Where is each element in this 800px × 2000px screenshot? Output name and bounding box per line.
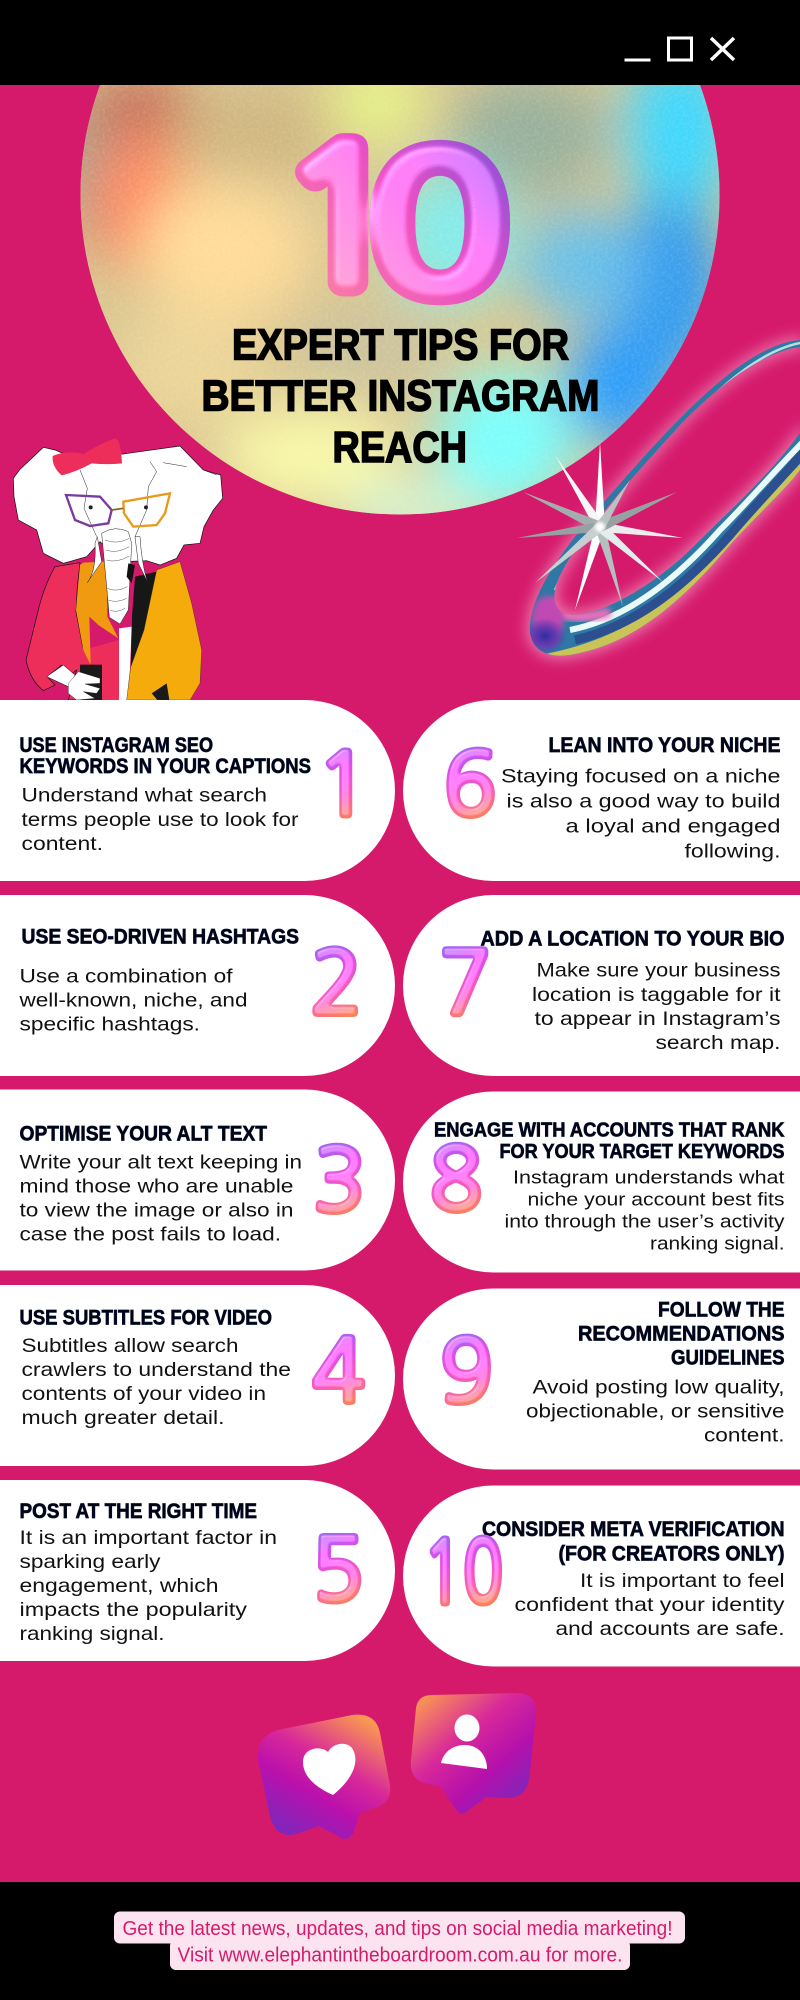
body 2 — [18, 966, 248, 1036]
icon: person speech bubble — [411, 1693, 536, 1814]
body 5: impacts the popularity — [20, 1599, 247, 1621]
body 7: location is taggable for it — [532, 984, 781, 1006]
card 8 — [403, 1092, 800, 1272]
body 5 — [20, 1527, 277, 1645]
body 8: Instagram understands what — [513, 1168, 784, 1188]
dark inner shade — [575, 450, 800, 640]
red bow — [53, 438, 122, 475]
body 7 — [532, 960, 781, 1054]
person head — [454, 1714, 480, 1742]
body 9 — [526, 1376, 784, 1446]
body 1 — [22, 784, 299, 855]
title: BETTER INSTAGRAM — [202, 372, 600, 420]
body 5: ranking signal. — [20, 1623, 164, 1645]
body 5: It is an important factor in — [20, 1527, 277, 1549]
magenta tip — [532, 596, 564, 640]
number 5: 5 — [312, 1527, 364, 1613]
body 3: case the post fails to load. — [20, 1224, 281, 1246]
heading 6: LEAN INTO YOUR NICHE — [548, 734, 780, 757]
highlight line 2 — [170, 1940, 630, 1970]
red jacket — [26, 563, 92, 700]
ring band — [530, 340, 800, 656]
heart — [303, 1744, 355, 1795]
body 8 — [504, 1168, 784, 1254]
yellow outer edge — [548, 468, 800, 660]
body 1: content. — [22, 833, 103, 855]
scarf knot — [127, 563, 135, 583]
heading 2: USE SEO-DRIVEN HASHTAGS — [22, 926, 299, 948]
black lapel — [131, 572, 157, 667]
number 3: 3 — [313, 1138, 366, 1224]
eyes — [89, 505, 93, 509]
body 3: Write your alt text keeping in — [20, 1152, 302, 1174]
heading 9: FOLLOW THE — [658, 1298, 784, 1322]
body 5: sparking early — [20, 1551, 161, 1573]
card 6 — [403, 700, 800, 881]
body 9: content. — [704, 1424, 784, 1446]
body 6: following. — [684, 840, 780, 862]
body 7: Make sure your business — [536, 960, 781, 982]
hand — [68, 672, 100, 700]
body 3 — [20, 1152, 302, 1246]
header bar with window controls — [0, 0, 800, 85]
highlight line 1 — [114, 1912, 685, 1944]
orange scarf — [76, 562, 118, 665]
body 10: confident that your identity — [514, 1594, 785, 1616]
yellow jacket — [127, 562, 202, 700]
body 7: to appear in Instagram’s — [534, 1008, 781, 1030]
heading 10 — [482, 1518, 784, 1566]
phone — [80, 665, 102, 700]
glasses — [66, 495, 112, 526]
body 9: objectionable, or sensitive — [526, 1400, 784, 1422]
body 4: Subtitles allow search — [22, 1335, 238, 1357]
icon: maximize — [668, 38, 692, 60]
number 4: 4 — [312, 1328, 365, 1414]
white shirt — [119, 627, 132, 700]
card 7 — [403, 895, 800, 1076]
card 9 — [403, 1288, 800, 1470]
arm — [47, 665, 75, 687]
elephant mascot — [13, 438, 223, 700]
body 10: It is important to feel — [580, 1570, 784, 1592]
body 6: is also a good way to build — [506, 790, 780, 812]
number 8: 8 — [430, 1136, 482, 1222]
body 10 — [514, 1570, 785, 1640]
heading 10: (FOR CREATORS ONLY) — [558, 1542, 784, 1566]
heading 4: USE SUBTITLES FOR VIDEO — [20, 1306, 272, 1330]
big balloon number 10: 1 — [279, 124, 404, 311]
heading 9: GUIDELINES — [671, 1346, 784, 1370]
red shirt — [80, 640, 119, 700]
body 4: much greater detail. — [22, 1407, 224, 1429]
number 1: 1 — [317, 742, 369, 828]
body 4: crawlers to understand the — [22, 1359, 291, 1381]
card 10 — [403, 1486, 800, 1666]
heading 1: USE INSTAGRAM SEO — [20, 734, 213, 757]
body 3: to view the image or also in — [20, 1200, 294, 1222]
body 6 — [501, 766, 780, 862]
icon: heart speech bubble — [258, 1715, 390, 1839]
body 4 — [22, 1335, 291, 1429]
icon: close — [711, 38, 734, 60]
iridescent foil circle — [80, 85, 720, 514]
body 3: mind those who are unable — [20, 1176, 294, 1198]
footer call to action — [114, 1912, 685, 1970]
footer bar — [0, 1882, 800, 2000]
number 6: 6 — [444, 742, 496, 828]
card 1 — [0, 700, 395, 881]
body 1: Understand what search — [22, 784, 267, 806]
heading 9 — [578, 1298, 784, 1370]
body 5: engagement, which — [20, 1575, 218, 1597]
upper band highlight — [555, 343, 800, 590]
card 3 — [0, 1090, 395, 1270]
heading 5: POST AT THE RIGHT TIME — [20, 1500, 257, 1523]
number 9: 9 — [440, 1328, 493, 1414]
footer text line 2: Visit www.elephantintheboardroom.com.au for more. — [178, 1944, 622, 1966]
body 6: a loyal and engaged — [566, 816, 780, 838]
body 7: search map. — [656, 1032, 780, 1054]
heading 1 — [20, 734, 311, 778]
body 2: specific hashtags. — [20, 1014, 200, 1036]
pocket — [152, 683, 169, 700]
title — [202, 320, 600, 472]
card 5 — [0, 1480, 395, 1661]
heading 8 — [434, 1120, 785, 1163]
big balloon number 10: 0 — [370, 132, 508, 319]
trunk — [102, 529, 132, 624]
body 9: Avoid posting low quality, — [532, 1376, 784, 1398]
footer text line 1: Get the latest news, updates, and tips on social media marketing! — [122, 1918, 672, 1940]
body 1: terms people use to look for — [22, 809, 299, 831]
white highlight — [570, 440, 800, 630]
body 4: contents of your video in — [22, 1383, 266, 1405]
heading 10: CONSIDER META VERIFICATION — [482, 1518, 784, 1541]
body 6: Staying focused on a niche — [501, 766, 780, 788]
title: EXPERT TIPS FOR — [232, 320, 569, 370]
head and ears — [13, 446, 223, 565]
face lines — [80, 462, 217, 537]
title: REACH — [332, 423, 467, 472]
card 4 — [0, 1285, 395, 1466]
heading 9: RECOMMENDATIONS — [578, 1322, 784, 1346]
number 10: 10 — [423, 1530, 503, 1616]
body 10: and accounts are safe. — [556, 1618, 784, 1640]
tusks — [87, 537, 147, 583]
body 8: niche your account best fits — [528, 1190, 784, 1210]
body 2: well-known, niche, and — [18, 990, 248, 1012]
sparkle — [517, 442, 683, 610]
number 7: 7 — [439, 940, 492, 1026]
iridescent ring with sparkle — [517, 330, 800, 670]
ring glow — [530, 340, 800, 656]
card 2 — [0, 895, 395, 1076]
icon: minimize — [624, 58, 650, 62]
body 8: into through the user’s activity — [504, 1212, 784, 1232]
person shoulders — [441, 1745, 487, 1769]
body 2: Use a combination of — [20, 966, 233, 988]
heading 1: KEYWORDS IN YOUR CAPTIONS — [20, 755, 311, 778]
number 2: 2 — [310, 940, 363, 1026]
body 8: ranking signal. — [650, 1234, 784, 1254]
heading 3: OPTIMISE YOUR ALT TEXT — [20, 1122, 267, 1146]
pink inner edge — [552, 600, 610, 617]
heading 7: ADD A LOCATION TO YOUR BIO — [480, 928, 784, 950]
